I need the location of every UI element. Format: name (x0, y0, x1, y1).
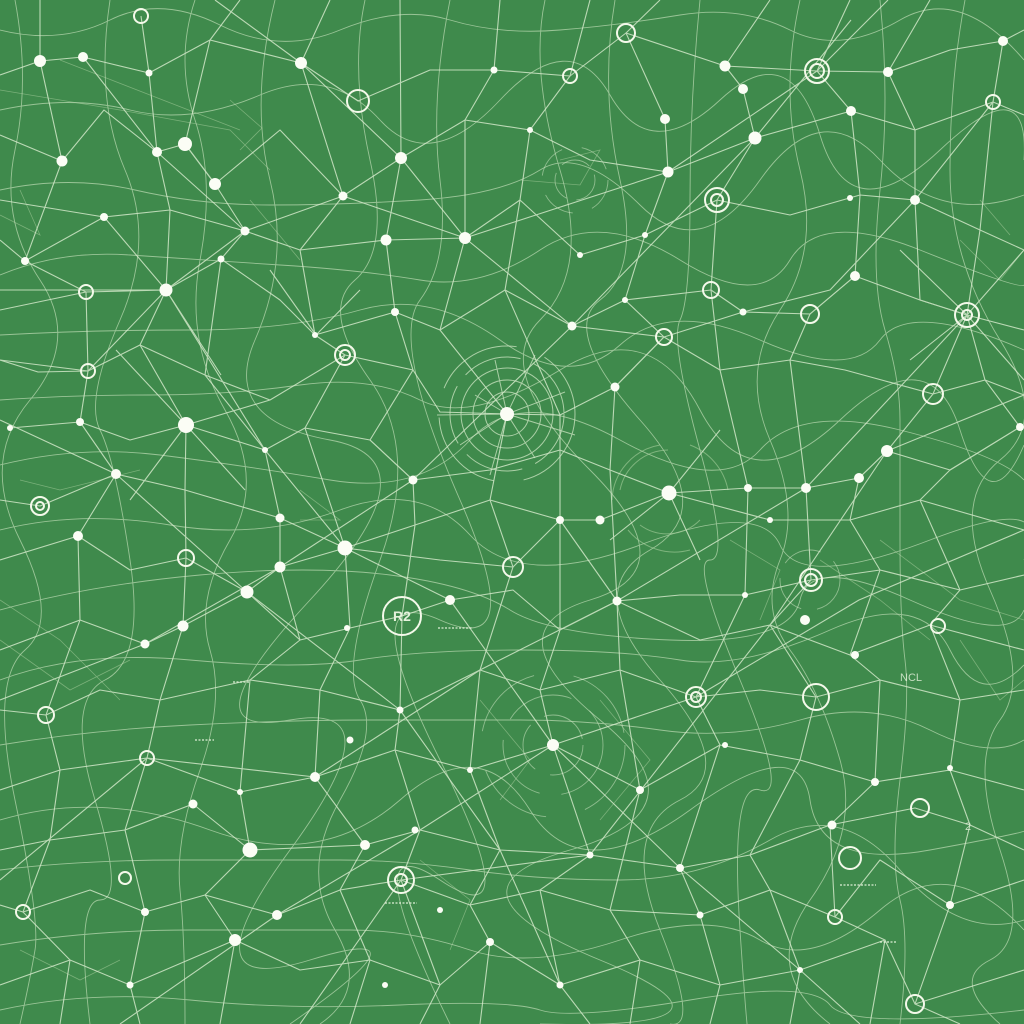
hub: right web arcs (612, 445, 728, 552)
illegible label marks (195, 628, 896, 942)
hub: lower web arcs (481, 147, 840, 817)
small labels: NCL (900, 672, 922, 684)
small labels: 2 (965, 821, 971, 833)
icon: labelled ring: R2 (393, 608, 411, 624)
icon: labelled ring (383, 597, 421, 635)
hub: concentric web centre (437, 346, 575, 482)
small labels (900, 672, 971, 833)
